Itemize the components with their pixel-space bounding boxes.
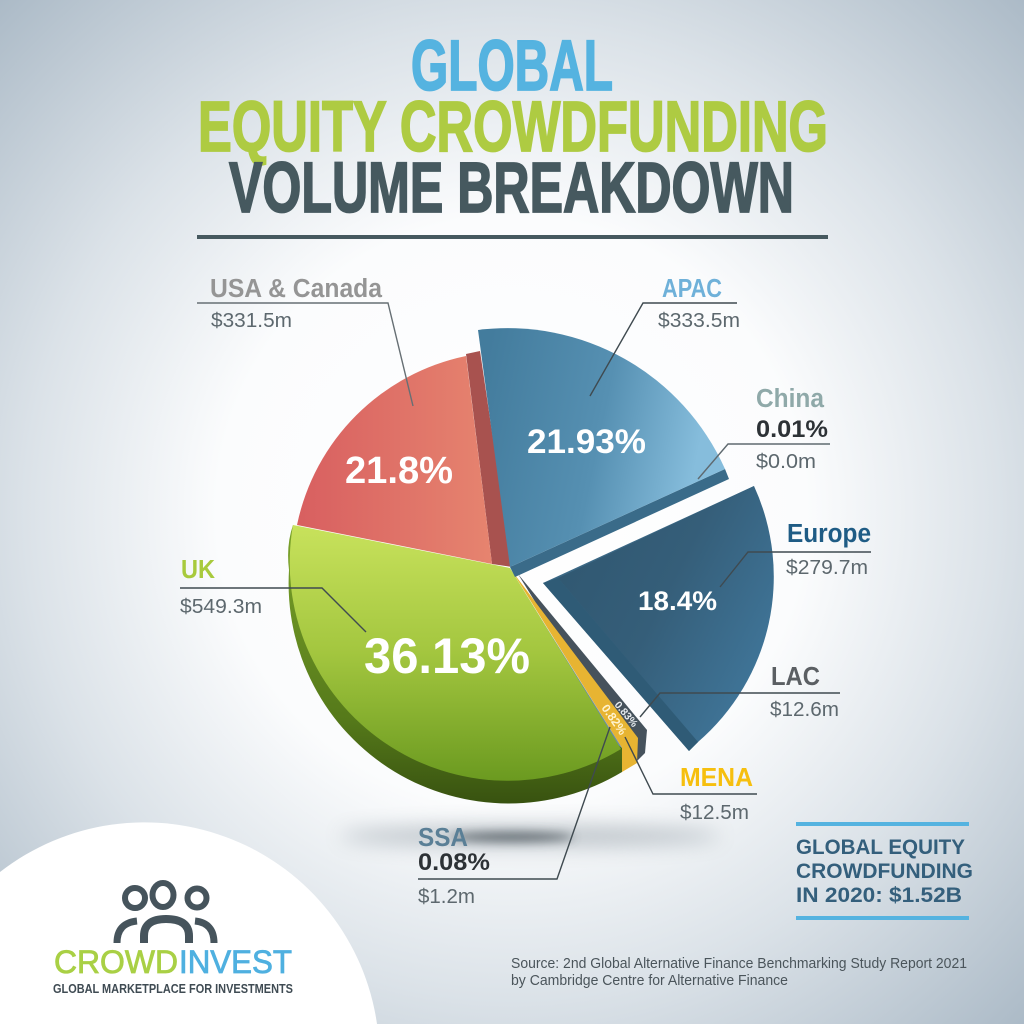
callout: global total: CROWDFUNDING [796,859,973,883]
label: LAC: $12.6m [770,699,839,721]
logo: CrowdInvest [53,883,293,996]
label: MENA: MENA [680,764,753,792]
value: 21.8%: 21.8% [345,450,453,492]
label: UK: $549.3m [180,596,262,618]
source note: Source: 2nd Global Alternative Finance Benchmarking Study Report 2021 [511,956,967,972]
label: China [756,385,828,473]
label: USA and Canada: USA & Canada [210,275,383,303]
slice: Europe side [543,486,754,751]
label: Europe: Europe [787,520,871,548]
source note: by Cambridge Centre for Alternative Finance [511,973,788,989]
label: UK [180,556,262,618]
value: 36.13%: 36.13% [364,628,530,684]
slice: Europe [558,486,774,742]
slice: USA and Canada side [466,351,512,567]
label: MENA: $12.5m [680,802,749,824]
label: Europe: $279.7m [786,557,868,579]
slice: LAC side [518,574,647,763]
label: SSA: SSA [418,824,468,852]
label: LAC: LAC [771,663,820,691]
callout: global total: GLOBAL EQUITY [796,835,965,859]
callout: global total [796,822,973,920]
slice: SSA edge [510,569,622,752]
title: GLOBAL [411,27,613,106]
value: 0.82%: 0.82% [599,702,630,738]
source note [511,956,967,989]
leader lines [180,303,871,879]
label: SSA [418,824,490,908]
label: China: $0.0m [756,451,816,473]
slice: China and APAC side [510,469,729,577]
label: APAC: APAC [662,275,722,303]
icon: people [117,883,214,943]
label: UK: UK [181,556,216,584]
label: Europe [786,520,871,579]
logo wordmark: CROWD [54,944,178,980]
value: 18.4%: 18.4% [638,586,717,616]
title [198,27,828,228]
callout: global total: IN 2020: $1.52B [796,883,962,907]
label: SSA: 0.08% [418,849,490,876]
ground shadow [340,825,720,847]
label: MENA [680,764,753,824]
slice: Europe dark edge [543,578,698,751]
pie chart [288,328,774,803]
label: APAC [658,275,740,332]
label: USA and Canada [210,275,383,332]
label: APAC: $333.5m [658,310,740,332]
title: VOLUME BREAKDOWN [229,149,794,228]
label: SSA: $1.2m [418,886,475,908]
label: LAC [770,663,839,721]
value: 0.83%: 0.83% [612,699,640,730]
label: USA and Canada: $331.5m [211,310,292,332]
slice: MENA [512,571,638,772]
logo tagline: GLOBAL MARKETPLACE FOR INVESTMENTS [53,982,293,996]
slice: UK side [288,525,622,803]
slice: APAC [478,328,725,567]
value: 21.93%: 21.93% [527,423,646,461]
title rule [197,235,828,239]
logo: CrowdInvest: INVEST [179,944,292,980]
slice: UK [290,525,621,781]
label: China: China [756,385,825,413]
logo panel [0,822,377,1024]
label: China: 0.01% [756,416,828,443]
slice: USA and Canada [297,356,492,564]
